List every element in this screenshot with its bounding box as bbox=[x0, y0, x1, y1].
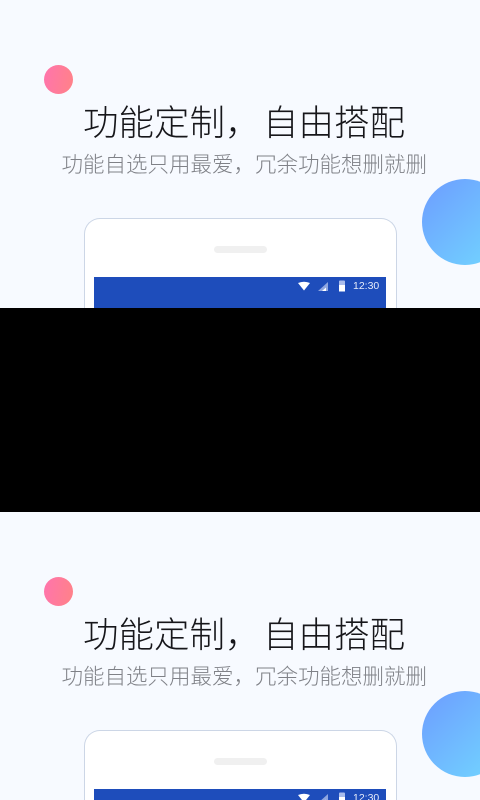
title bbox=[83, 607, 405, 658]
icon: blue decorative circle bbox=[422, 691, 480, 777]
icon: pink decorative circle bbox=[44, 65, 73, 94]
phone mockup bbox=[84, 218, 397, 309]
title: 自由搭配 bbox=[263, 95, 405, 146]
phone speaker bbox=[214, 758, 267, 765]
title: 自由搭配 bbox=[263, 607, 405, 658]
status time: 12:30 bbox=[353, 280, 379, 292]
status icons: wifi, signal, battery bbox=[298, 792, 345, 800]
status icons: wifi, signal, battery bbox=[298, 280, 345, 292]
title bbox=[83, 95, 405, 146]
title: 功能定制， bbox=[83, 95, 261, 146]
icon: blue decorative circle bbox=[422, 179, 480, 265]
panel: bottom repeated feature card bbox=[0, 512, 480, 800]
subtitle: 功能自选只用最爱，冗余功能想删就删 bbox=[62, 660, 427, 691]
status bar bbox=[298, 280, 379, 292]
panel: top feature card bbox=[0, 0, 480, 308]
status bar bbox=[298, 792, 379, 800]
phone speaker bbox=[214, 246, 267, 253]
icon: pink decorative circle bbox=[44, 577, 73, 606]
phone screen bbox=[94, 789, 386, 800]
phone screen bbox=[94, 277, 386, 309]
title: 功能定制， bbox=[83, 607, 261, 658]
phone mockup bbox=[84, 730, 397, 800]
subtitle: 功能自选只用最爱，冗余功能想删就删 bbox=[62, 148, 427, 179]
